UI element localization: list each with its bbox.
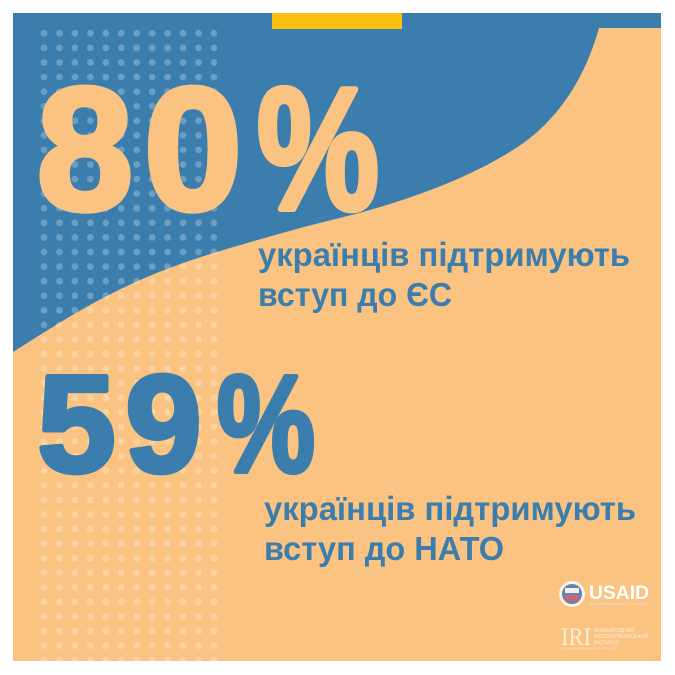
statistic: 59%: % [217,348,315,502]
text: EU support: українців підтримують [258,236,630,273]
caption: IRI name: ІНСТИТУТ [594,640,620,646]
accent bar [272,13,402,29]
dot pattern [36,26,222,661]
text: NATO support: вступ до НАТО [264,530,504,567]
text: NATO support: українців підтримують [264,490,636,527]
text: EU support: вступ до ЄС [258,276,452,313]
logo: IRI [561,624,650,651]
statistic: 80%: 0 [144,51,242,246]
icon: USAID seal [559,581,585,607]
statistic: 59%: 9 [126,348,202,502]
statistic: 80%: 8 [37,51,133,246]
statistic: 59%: 5 [38,348,116,502]
statistic: 80%: % [257,51,379,246]
caption: IRI name: МІЖНАРОДНИЙ [594,626,634,634]
caption: USAID tagline: ВІД АМЕРИКАНСЬКОГО НАРОДУ [590,601,648,606]
caption: IRI tagline: ПОШИРЕННЯ ДЕМОКРАТІЇ У СВІТІ [561,646,619,650]
wordmark: USAID: USAID [589,583,649,604]
wordmark: IRI: IRI [561,624,591,651]
logo: USAID [559,581,649,607]
caption: IRI name: РЕСПУБЛІКАНСЬКИЙ [594,632,648,640]
